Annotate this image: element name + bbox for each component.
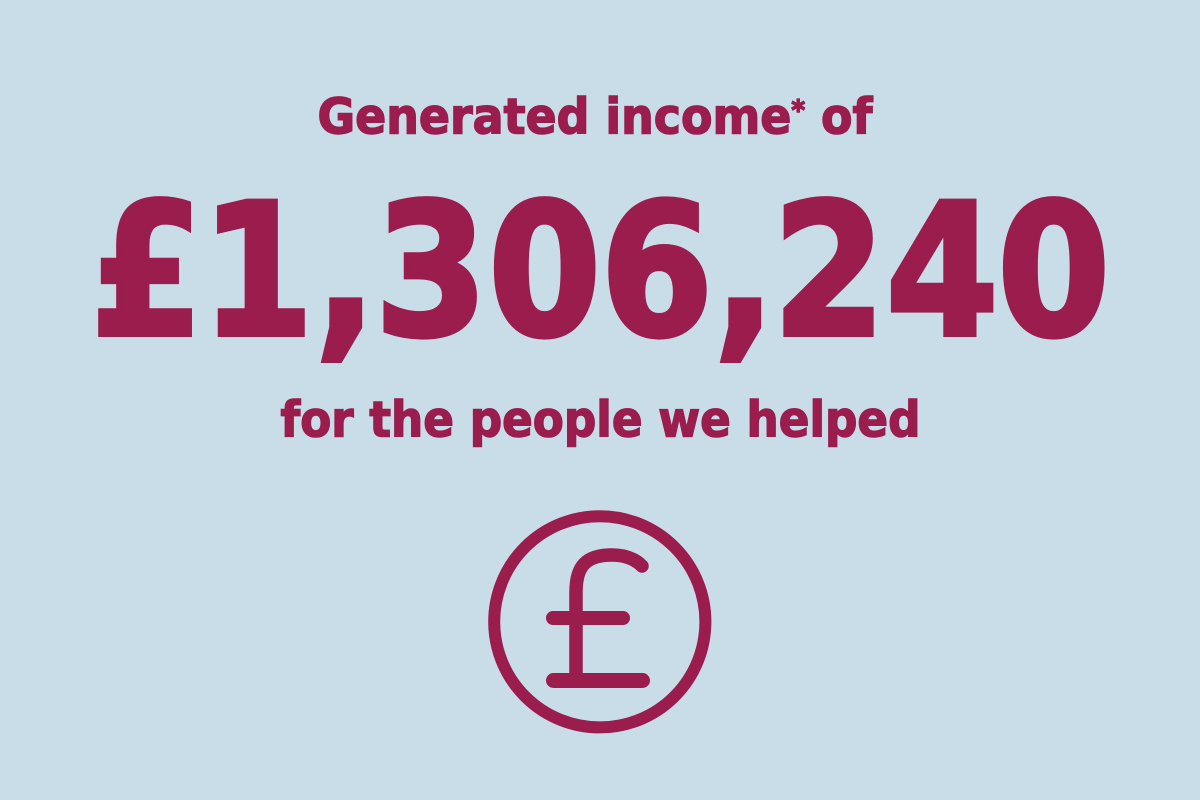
heading: generated income: Generated income xyxy=(318,88,824,146)
big number: £1,306,240 xyxy=(91,165,1110,378)
heading: generated income: of xyxy=(805,88,873,146)
heading: generated income: * xyxy=(791,94,805,126)
subheading: for the people we helped: for the people we helped xyxy=(280,392,920,448)
icon: pound coin xyxy=(494,516,705,727)
